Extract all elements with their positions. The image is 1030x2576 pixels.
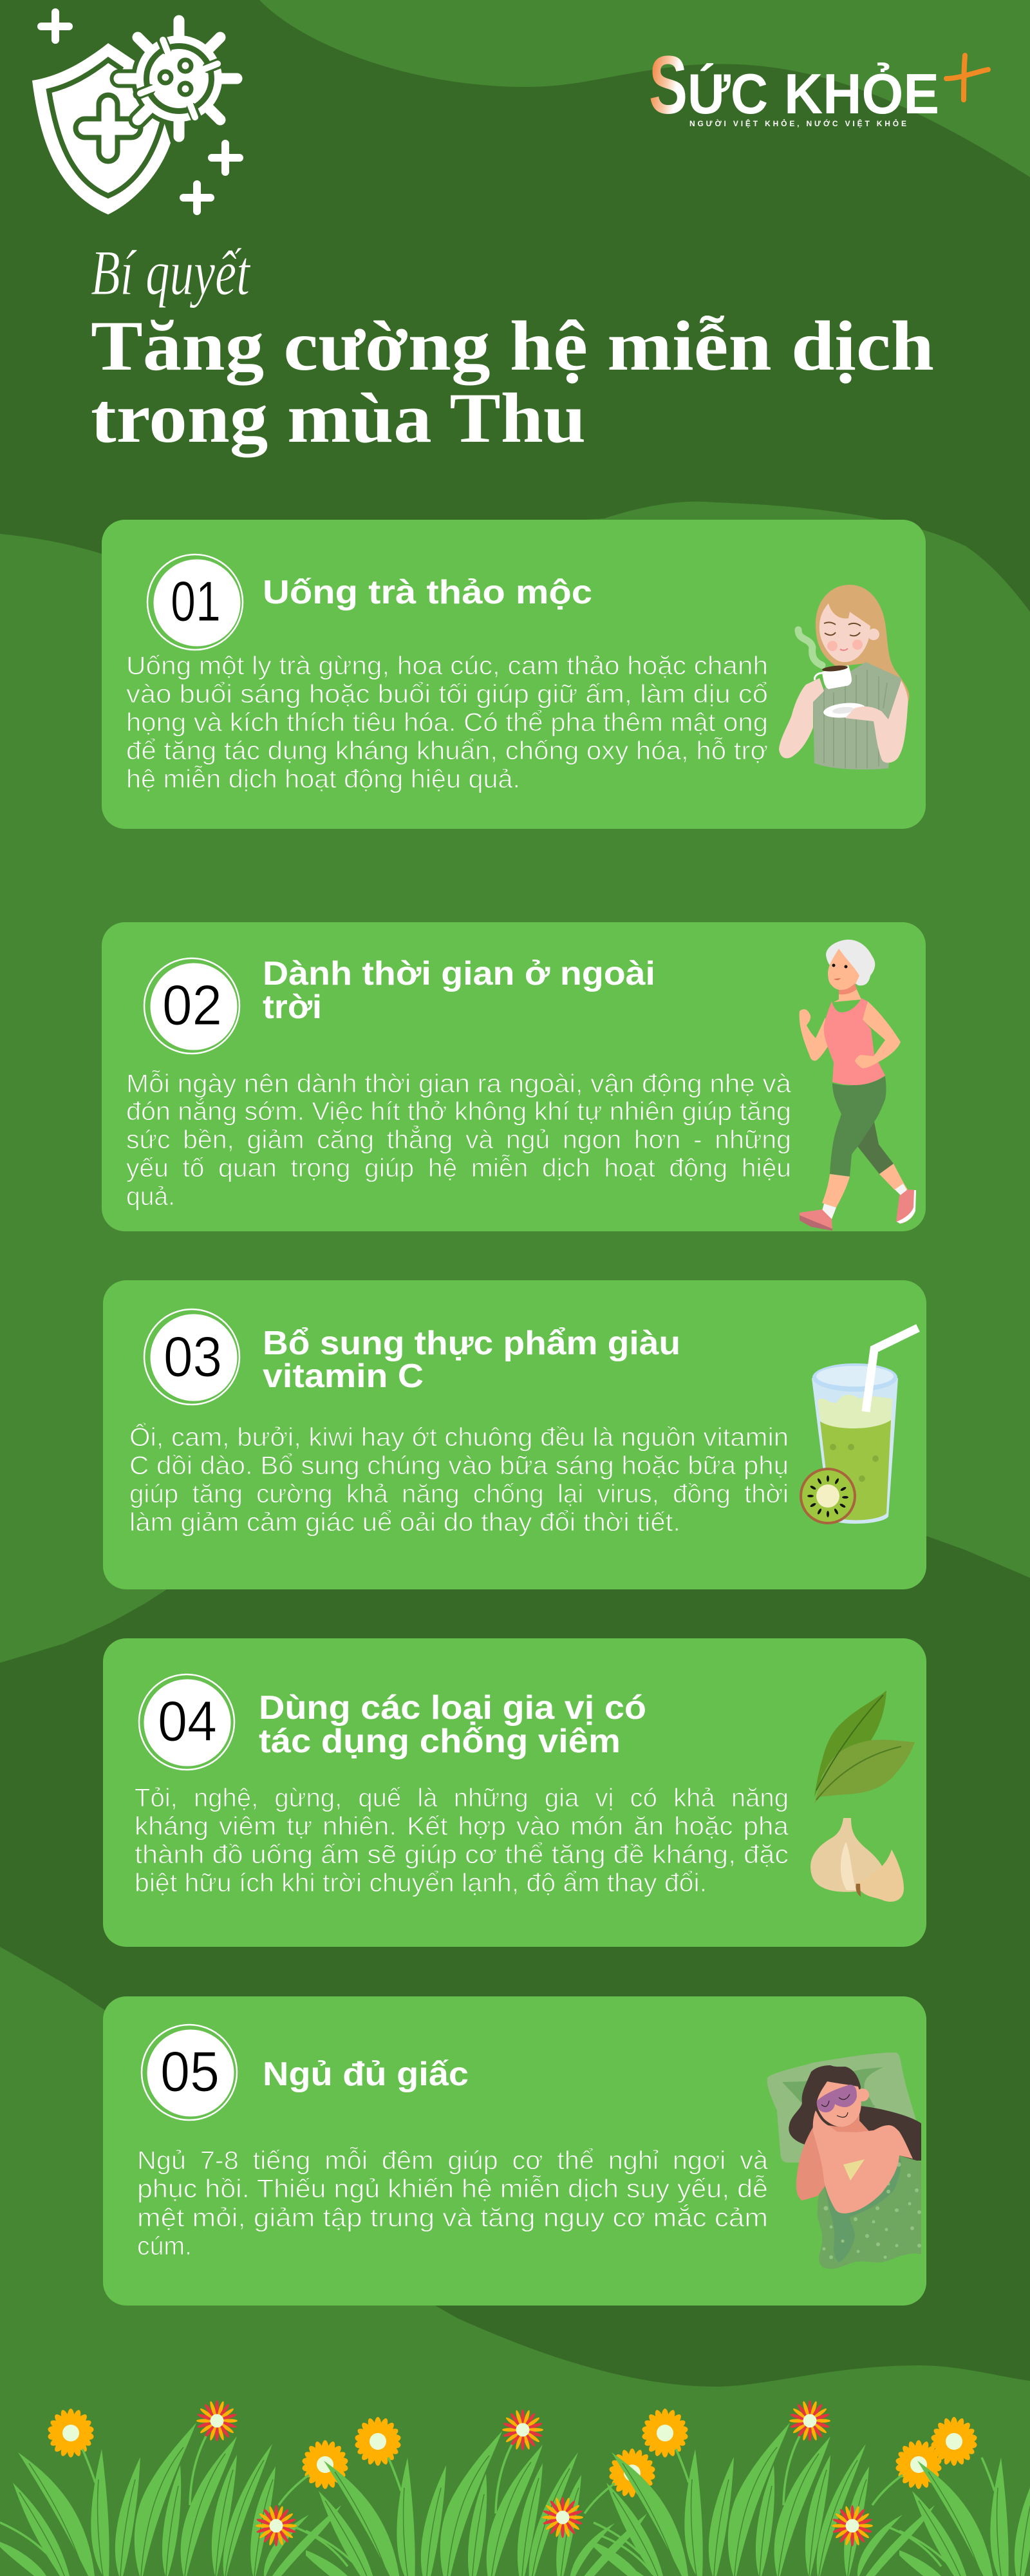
body text bbox=[126, 1069, 792, 1211]
orange flower bbox=[930, 2417, 978, 2466]
decoration: lower flowers bbox=[256, 2497, 873, 2546]
orange flower bbox=[354, 2417, 402, 2466]
heading: tác dụng chống viêm bbox=[259, 1723, 621, 1760]
heading: Ngủ đủ giấc bbox=[263, 2056, 469, 2093]
body text: mệt mỏi, giảm tập trung và tăng nguy cơ mắc cảm bbox=[137, 2203, 768, 2232]
kiwi slice bbox=[800, 1468, 856, 1524]
red flower bbox=[542, 2497, 583, 2538]
plus sign top left bbox=[41, 12, 69, 40]
background: bottom wave bbox=[0, 1947, 1030, 2576]
body text bbox=[135, 1784, 789, 1897]
illustration: kiwi smoothie bbox=[800, 1328, 918, 1524]
body text: Ngủ 7-8 tiếng mỗi đêm giúp cơ thể nghỉ ngơi và bbox=[137, 2146, 769, 2175]
card bbox=[102, 520, 926, 829]
number badge bbox=[142, 2025, 237, 2120]
logo wordmark: KHỎE bbox=[784, 62, 939, 126]
body text bbox=[137, 2146, 769, 2260]
body text: Mỗi ngày nên dành thời gian ra ngoài, vận động nhẹ và bbox=[126, 1069, 792, 1098]
virus inner gap bbox=[144, 43, 214, 114]
body text: sức bền, giảm căng thẳng và ngủ ngon hơn - những bbox=[126, 1124, 791, 1154]
heading bbox=[263, 1325, 680, 1395]
decoration: grass patch 3 bbox=[594, 2423, 941, 2576]
decoration: grass patch 1 bbox=[0, 2423, 348, 2576]
heading bbox=[263, 955, 655, 1026]
heading: Dành thời gian ở ngoài bbox=[263, 955, 655, 992]
number badge bbox=[144, 958, 239, 1054]
orange flower bbox=[608, 2448, 656, 2497]
body text: biệt hữu ích khi trời chuyển lạnh, độ ẩm thay đổi. bbox=[135, 1869, 707, 1897]
decoration: upper flowers bbox=[47, 2400, 978, 2497]
number badge bbox=[144, 1309, 239, 1405]
orange flower bbox=[47, 2409, 95, 2458]
title: trong mùa Thu bbox=[91, 379, 586, 457]
icon: shield with virus bbox=[32, 12, 239, 214]
number badge bbox=[147, 554, 243, 650]
heading: Dùng các loại gia vị có bbox=[259, 1689, 646, 1727]
plus sign right bbox=[212, 144, 239, 172]
panel: tip 04 spices bbox=[103, 1638, 926, 1947]
number badge: 01 bbox=[171, 569, 221, 633]
card bbox=[103, 1996, 926, 2306]
body text: vào buổi sáng hoặc buổi tối giúp giữ ấm, làm dịu cổ bbox=[126, 680, 768, 708]
illustration: garlic bbox=[810, 1818, 904, 1902]
number badge: 04 bbox=[158, 1689, 217, 1753]
body text: phục hồi. Thiếu ngủ khiến hệ miễn dịch suy yếu, dễ bbox=[137, 2174, 768, 2203]
shield inner outline bbox=[49, 60, 162, 196]
logo wordmark: ỨC bbox=[688, 62, 768, 126]
virus body bbox=[149, 49, 209, 108]
body text: thành đồ uống ấm sẽ giúp cơ thể tăng đề kháng, đặc bbox=[135, 1841, 789, 1869]
decoration: grass patch 4 bbox=[899, 2431, 1030, 2576]
red flower bbox=[502, 2409, 543, 2450]
background: middle wave bbox=[0, 502, 1030, 1663]
panel: tip 02 time outdoors bbox=[102, 922, 926, 1231]
virus small spikes bbox=[138, 39, 220, 118]
background: top right wave bbox=[259, 0, 1030, 177]
illustration: leaves bbox=[814, 1690, 915, 1804]
card bbox=[103, 1638, 926, 1947]
decoration: grass patch 2 bbox=[306, 2431, 653, 2576]
plus sign bottom bbox=[183, 184, 211, 211]
logo tagline: NGƯỜI VIỆT KHỎE, NƯỚC VIỆT KHỎE bbox=[689, 118, 906, 128]
body text: kháng viêm tự nhiên. Kết hợp vào món ăn hoặc pha bbox=[135, 1812, 789, 1841]
body text: họng và kích thích tiêu hóa. Có thể pha thêm mật ong bbox=[126, 708, 768, 737]
shield plus bbox=[85, 104, 131, 152]
body text: Ổi, cam, bưởi, kiwi hay ớt chuông đều là nguồn vitamin bbox=[129, 1421, 789, 1452]
body text: giúp tăng cường khả năng chống lại virus, đồng thời bbox=[129, 1480, 789, 1508]
title bbox=[91, 307, 934, 457]
orange flower bbox=[641, 2409, 689, 2458]
logo plus bbox=[946, 55, 988, 100]
body text bbox=[129, 1421, 789, 1537]
body text: Tỏi, nghệ, gừng, quế là những gia vị có khả năng bbox=[135, 1784, 789, 1812]
illustration: elderly woman walking bbox=[800, 940, 916, 1231]
heading: vitamin C bbox=[263, 1358, 424, 1395]
body text: đón nắng sớm. Việc hít thở không khí tự nhiên giúp tăng bbox=[126, 1097, 791, 1126]
heading: trời bbox=[263, 989, 322, 1026]
body text: cúm. bbox=[137, 2232, 192, 2260]
red flower bbox=[196, 2400, 238, 2441]
virus ring bbox=[140, 39, 218, 118]
logo wordmark bbox=[649, 39, 939, 131]
red flower bbox=[789, 2400, 830, 2441]
body text: làm giảm cảm giác uể oải do thay đổi thời tiết. bbox=[129, 1508, 680, 1537]
body text: yếu tố quan trọng giúp hệ miễn dịch hoạt động hiệu bbox=[126, 1153, 791, 1182]
body text: Uống một ly trà gừng, hoa cúc, cam thảo hoặc chanh bbox=[126, 652, 768, 680]
orange flower bbox=[895, 2440, 942, 2489]
number badge: 03 bbox=[164, 1325, 222, 1388]
panel: tip 03 vitamin C bbox=[103, 1280, 926, 1589]
body text: quả. bbox=[126, 1182, 175, 1211]
virus nuclei bbox=[160, 60, 191, 95]
red flower bbox=[832, 2505, 873, 2546]
body text: hệ miễn dịch hoạt động hiệu quả. bbox=[126, 764, 520, 793]
number badge bbox=[139, 1674, 234, 1770]
number badge: 02 bbox=[162, 973, 222, 1037]
shield bbox=[32, 43, 171, 214]
heading: Bổ sung thực phẩm giàu bbox=[263, 1325, 680, 1362]
panel: tip 05 sleep bbox=[103, 1996, 926, 2306]
logo: Sức Khỏe+ bbox=[649, 39, 988, 131]
body text: C dồi dào. Bổ sung chúng vào bữa sáng hoặc bữa phụ bbox=[129, 1452, 789, 1480]
title: Tăng cường hệ miễn dịch bbox=[91, 307, 934, 385]
virus spikes bbox=[119, 21, 237, 137]
illustration: woman with tea bbox=[779, 585, 910, 770]
logo wordmark: S bbox=[649, 39, 688, 131]
red flower bbox=[256, 2505, 297, 2546]
orange flower bbox=[301, 2440, 349, 2489]
panel: tip 01 herbal tea bbox=[102, 520, 926, 829]
body text bbox=[126, 652, 768, 793]
heading: Bí quyết: Bí quyết bbox=[91, 237, 251, 308]
virus halo bbox=[119, 37, 218, 137]
illustration: woman sleeping with eye mask bbox=[767, 2052, 921, 2269]
card bbox=[103, 1280, 926, 1589]
body text: để tăng tác dụng kháng khuẩn, chống oxy hóa, hỗ trợ bbox=[126, 736, 768, 765]
heading bbox=[259, 1689, 646, 1760]
heading: Uống trà thảo mộc bbox=[263, 574, 592, 611]
card bbox=[102, 922, 926, 1231]
number badge: 05 bbox=[160, 2040, 220, 2103]
